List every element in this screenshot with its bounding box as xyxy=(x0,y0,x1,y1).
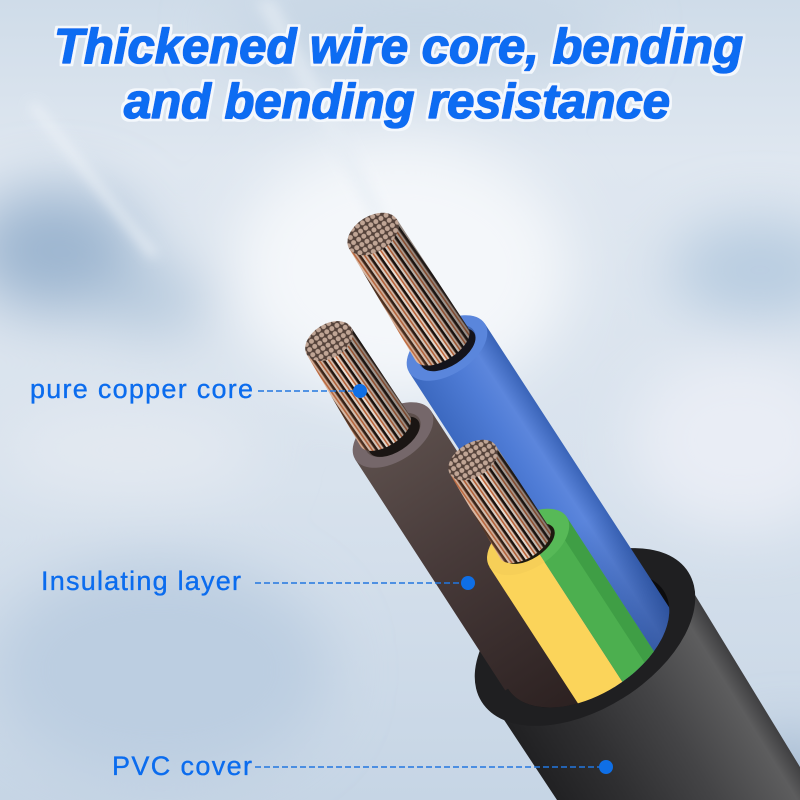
yellow and green insulated wire xyxy=(487,508,654,704)
callout: PVC cover: PVC cover xyxy=(112,751,252,781)
inner wires xyxy=(352,315,670,708)
title: Thickened wire core, bending xyxy=(54,20,743,74)
black PVC sheath xyxy=(443,511,800,800)
title xyxy=(54,20,743,129)
callout: insulating layer: Insulating layer xyxy=(41,566,241,596)
brown insulated wire xyxy=(352,402,578,708)
icon: yellow-green wire copper core xyxy=(439,430,557,571)
blue insulated wire xyxy=(406,315,670,688)
title: and bending resistance xyxy=(124,75,670,129)
callout: pure copper core: pure copper core xyxy=(30,374,253,404)
callout: PVC cover xyxy=(112,751,613,781)
callout: pure copper core xyxy=(30,374,367,404)
callout: insulating layer xyxy=(41,566,475,596)
icon: brown wire copper core xyxy=(295,311,418,459)
icon: blue wire copper core xyxy=(337,202,477,374)
